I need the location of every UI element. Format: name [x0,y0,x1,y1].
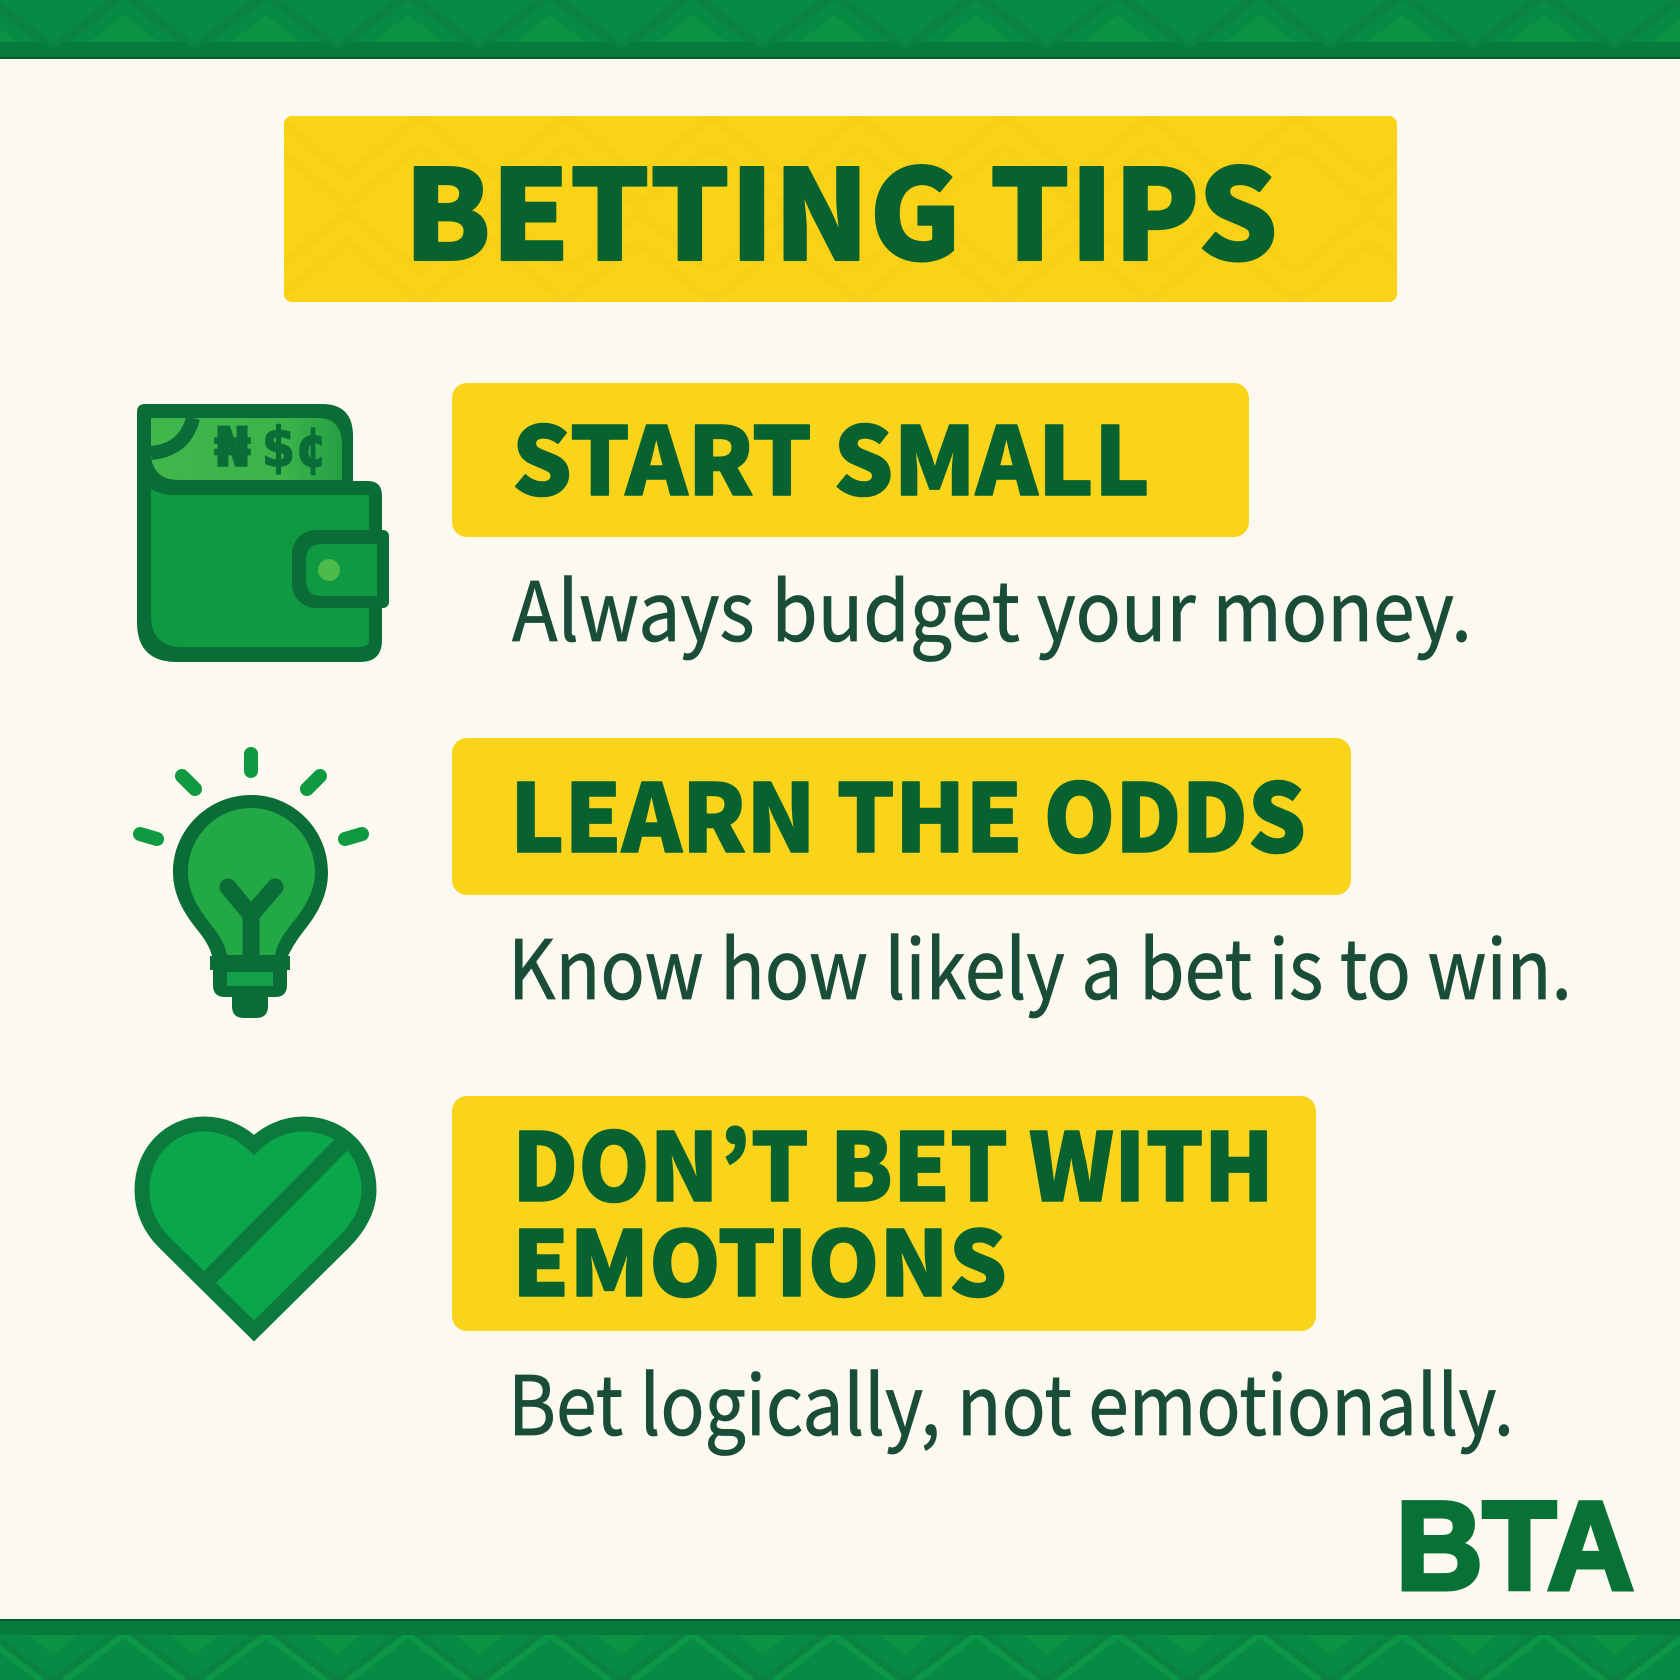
heading box: learn the odds: LEARN THE ODDS [510,744,1306,880]
icon: wallet [137,404,389,662]
text: start small description: Always budget your money. [512,546,1472,665]
heading box: don't bet with emotions: DON’T BET WITH [512,1093,1274,1229]
heading box: start small: START SMALL [512,387,1150,523]
top patterned band [0,0,1680,59]
panel: start small [452,383,1472,665]
icon: heart [142,1124,369,1331]
panel: learn the odds [452,738,1572,1023]
panel: don't bet with emotions [452,1093,1514,1459]
heading box: don't bet with emotions: EMOTIONS [512,1192,1007,1322]
logo: BTA: BTA [1396,1477,1634,1616]
text: don't bet description: Bet logically, not emotionally. [508,1340,1514,1459]
bottom patterned band [0,1619,1680,1680]
icon: wallet: ₦ [214,416,251,479]
text: learn the odds description: Know how likely a bet is to win. [508,904,1572,1023]
icon: wallet: $ [262,416,295,479]
title banner: BETTING TIPS [404,115,1278,296]
heading box: don't bet with emotions [452,1093,1316,1331]
icon: light bulb [140,754,362,1018]
icon: wallet: ¢ [296,416,327,479]
